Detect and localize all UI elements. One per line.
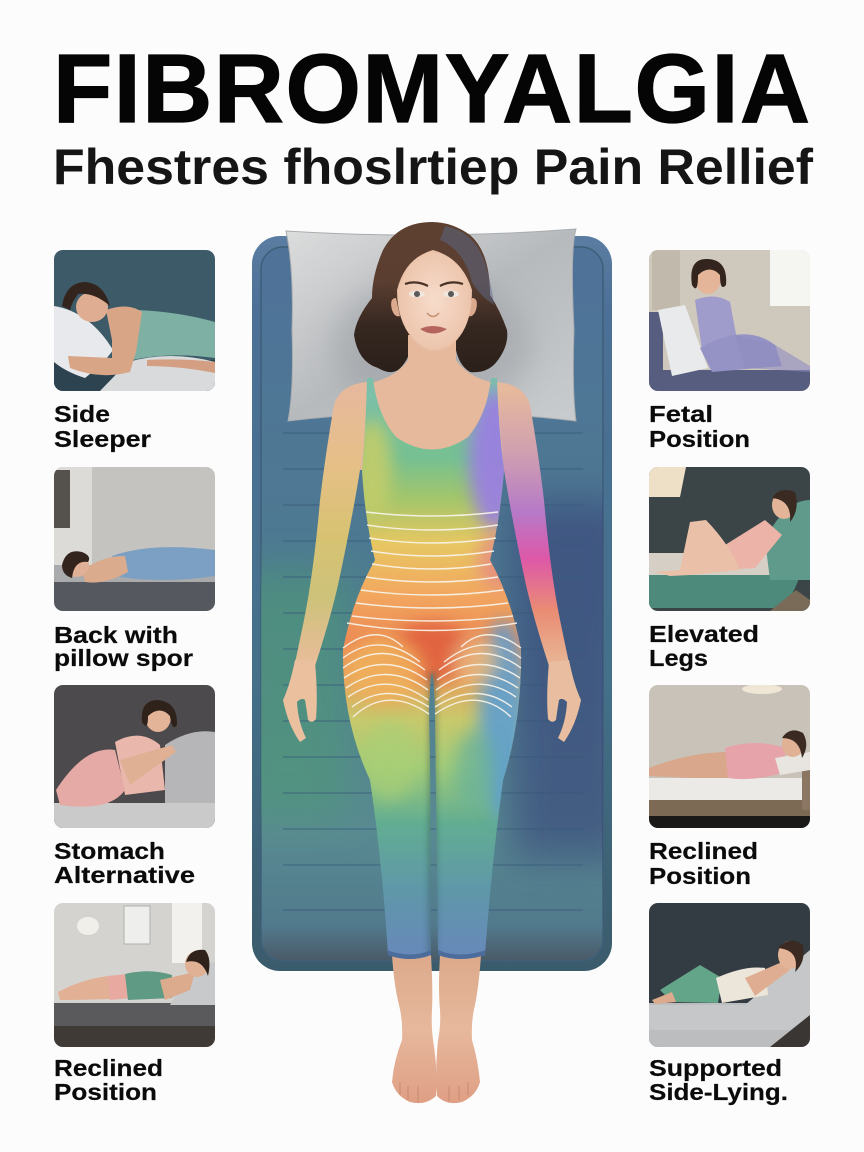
label: reclined: Reclined (54, 1055, 163, 1081)
toe lines (400, 1082, 468, 1102)
label: back with: Back with (54, 622, 178, 648)
left foot (392, 955, 437, 1103)
heat contour lines (343, 512, 521, 717)
panel: elevated legs (649, 467, 810, 611)
label: sleeper: Sleeper (54, 426, 151, 452)
ears (391, 298, 477, 316)
panel: reclined position left (54, 903, 215, 1047)
right foot (436, 955, 481, 1103)
panel: back with pillow (54, 467, 215, 611)
left arm (295, 382, 368, 666)
right hand (547, 660, 581, 742)
label: reclined: Reclined (649, 838, 758, 864)
panel: fetal position (649, 250, 810, 391)
left hand (283, 660, 317, 742)
label: stomach: Stomach (54, 838, 165, 864)
label: pillow spor: pillow spor (54, 645, 193, 671)
label: fetal: Fetal (649, 401, 713, 427)
label: legs: Legs (649, 645, 708, 671)
figure: woman (283, 222, 581, 1103)
subtitle: Fhestres fhoslrtiep Pain Rellief (53, 139, 813, 195)
right arm (496, 382, 569, 666)
neck and chest (360, 335, 504, 470)
title: FIBROMYALGIA (53, 34, 810, 143)
hair right highlight (440, 226, 494, 305)
nose and mouth (420, 313, 447, 334)
label: side-lying: Side-Lying. (649, 1079, 788, 1105)
face (397, 250, 472, 351)
eyes (405, 282, 463, 297)
panel: supported side-lying (649, 903, 810, 1047)
label: elevated: Elevated (649, 621, 759, 647)
leotard and leggings (342, 378, 522, 959)
label: side: Side (54, 401, 110, 427)
panel: reclined position right (649, 684, 810, 828)
panel: side sleeper (54, 250, 215, 391)
label: position: Position (649, 426, 750, 452)
label: position: Position (54, 1079, 157, 1105)
label: position: Position (649, 863, 751, 889)
mattress (252, 236, 612, 971)
hair back (354, 222, 507, 372)
pillow (286, 229, 576, 421)
label: supported: Supported (649, 1055, 782, 1081)
panel: stomach alternative (54, 685, 215, 828)
label: alternative: Alternative (54, 862, 195, 888)
